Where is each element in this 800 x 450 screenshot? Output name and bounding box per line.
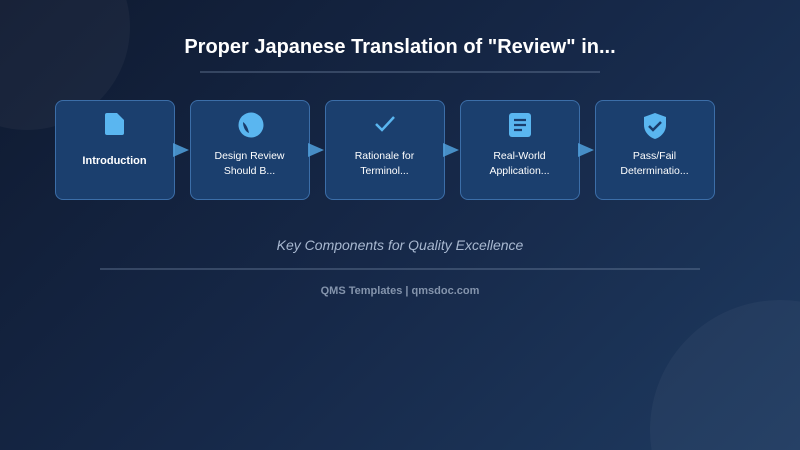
- title: Proper Japanese Translation of "Review" in...: [184, 36, 616, 58]
- step 4: Real-World: Application...: [489, 165, 550, 177]
- arrow 1: [173, 143, 189, 157]
- step 2: Design Review: [190, 100, 310, 200]
- arrow 2: [308, 143, 324, 157]
- step 1: Introduction: Introduction: [82, 155, 147, 167]
- step 3: Rationale: Rationale for: [355, 150, 414, 162]
- step 2: Design Review: Design Review: [214, 150, 285, 162]
- arrow 3: [443, 143, 459, 157]
- step 2: Design Review: Should B...: [224, 165, 275, 177]
- step 5: Pass/Fail: [595, 100, 715, 200]
- step 3: Rationale: [325, 100, 445, 200]
- step 4: Real-World: Real-World: [493, 150, 546, 162]
- icon: document: [105, 113, 124, 135]
- step 3: Rationale: Terminol...: [360, 165, 409, 177]
- footer: QMS Templates | qmsdoc.com: [321, 285, 479, 297]
- icon: leaf circle: [238, 112, 264, 138]
- step 5: Pass/Fail: Determinatio...: [620, 165, 689, 177]
- subtitle: Key Components for Quality Excellence: [277, 237, 523, 253]
- step 4: Real-World: [460, 100, 580, 200]
- step 5: Pass/Fail: Pass/Fail: [633, 150, 676, 162]
- arrow 4: [578, 143, 594, 157]
- icon: check: [375, 116, 395, 132]
- icon: text document: [509, 113, 531, 137]
- icon: shield check: [644, 113, 666, 139]
- step 1: Introduction: [55, 100, 175, 200]
